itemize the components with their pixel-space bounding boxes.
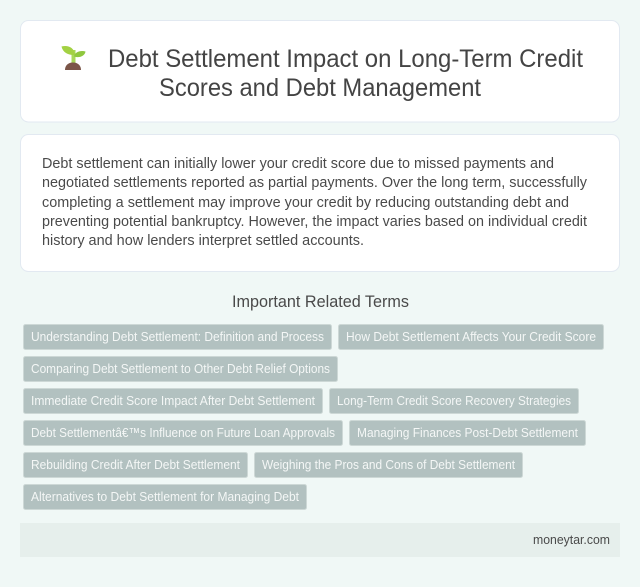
tag xyxy=(24,356,338,382)
title: Scores and Debt Management xyxy=(159,74,481,102)
tag: Alternatives to Debt Settlement for Managing Debt xyxy=(31,489,299,504)
tag xyxy=(330,388,578,414)
description text: history and how lenders interpret settled accounts. xyxy=(42,232,364,249)
description text: negotiated settlements reported as partial payments. Over the long term, successfully xyxy=(42,174,587,191)
tag: Debt Settlementâ€™s Influence on Future Loan Approvals xyxy=(31,425,335,440)
tag: Comparing Debt Settlement to Other Debt Relief Options xyxy=(31,361,330,376)
tag: Immediate Credit Score Impact After Debt Settlement xyxy=(31,393,315,408)
tag xyxy=(24,452,248,478)
tag: Rebuilding Credit After Debt Settlement xyxy=(31,457,240,472)
tag xyxy=(338,324,604,350)
heading: important related terms: Important Related Terms xyxy=(232,293,409,311)
title: Debt Settlement Impact on Long-Term Credit xyxy=(108,45,583,73)
tag xyxy=(24,324,332,350)
description text: Debt settlement can initially lower your credit score due to missed payments and xyxy=(42,155,554,172)
tag xyxy=(254,452,522,478)
tag xyxy=(350,420,586,446)
description text: completing a settlement may improve your credit by reducing outstanding debt and xyxy=(42,194,569,211)
related terms tags xyxy=(24,324,604,510)
panel: description xyxy=(20,134,620,272)
tag: How Debt Settlement Affects Your Credit Score xyxy=(346,329,596,344)
footer xyxy=(20,523,620,557)
tag: Understanding Debt Settlement: Definition and Process xyxy=(31,329,324,344)
icon: sprout xyxy=(62,46,86,70)
title xyxy=(108,45,583,102)
tag: Weighing the Pros and Cons of Debt Settlement xyxy=(262,457,515,472)
tag xyxy=(24,484,306,510)
tag: Managing Finances Post-Debt Settlement xyxy=(357,425,578,440)
description text: preventing potential bankruptcy. However, the impact varies based on individual credit xyxy=(42,213,588,230)
tag: Long-Term Credit Score Recovery Strategies xyxy=(337,393,571,408)
tag xyxy=(24,420,342,446)
tag xyxy=(24,388,322,414)
header panel xyxy=(20,20,620,122)
footer: moneytar.com xyxy=(533,532,610,547)
description text xyxy=(42,155,588,249)
